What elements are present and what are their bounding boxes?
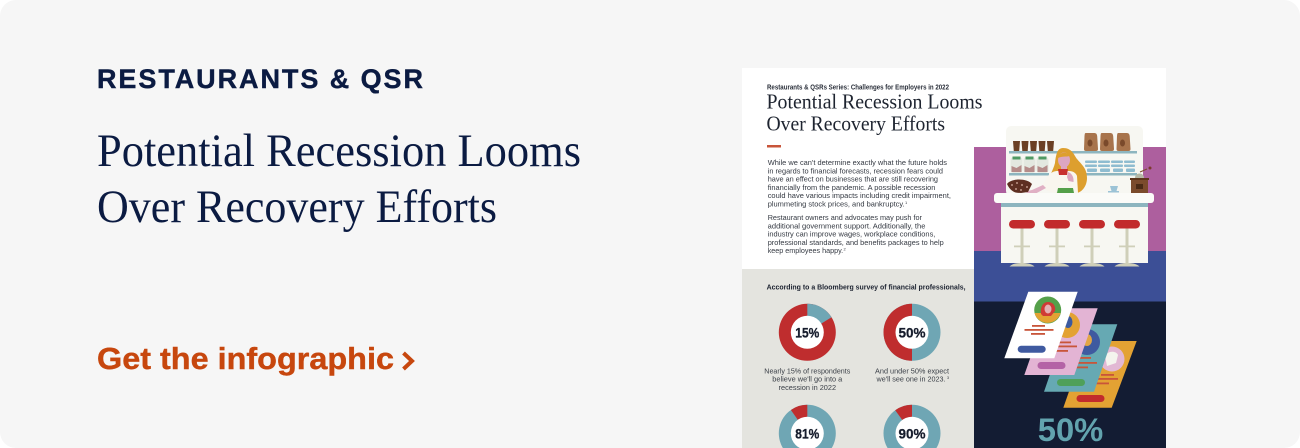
caption: 50%	[875, 366, 950, 384]
illustration: coffee shop counter	[974, 126, 1166, 302]
body paragraph one: could have various impacts including credit impairment,	[768, 191, 951, 200]
shelves	[1009, 151, 1137, 176]
card title	[766, 90, 982, 135]
series label: Restaurants & QSRs Series: Challenges for Employers in 2022	[767, 85, 949, 92]
call to action link: Get the infographic	[97, 341, 394, 376]
body paragraph one: have an effect on businesses that are still recovering	[768, 175, 938, 184]
profile card: orange	[1063, 341, 1137, 408]
caption: 50%: And under 50% expect	[875, 366, 950, 375]
panel: navy stat	[974, 292, 1166, 448]
donut: 81%	[779, 405, 836, 448]
caption: 15%: recession in 2022	[779, 383, 836, 392]
body paragraph one	[768, 158, 951, 208]
donut: 15%	[779, 304, 836, 361]
stacked bowls	[1085, 160, 1135, 172]
infographic preview card	[742, 68, 1166, 448]
body paragraph two: Restaurant owners and advocates may push for	[768, 213, 922, 222]
body paragraph one: in regards to financial forecasts, recession fears could	[768, 166, 943, 175]
eyebrow heading: RESTAURANTS & QSR	[97, 64, 423, 94]
donut: 50%: 50%	[898, 324, 926, 340]
card title: Over Recovery Efforts	[766, 111, 945, 135]
panel: survey donuts	[742, 269, 974, 448]
donut: 50%	[884, 304, 940, 361]
barista	[1026, 148, 1087, 195]
body paragraph two: 2	[844, 247, 846, 252]
donut: 90%: 90%	[898, 425, 926, 441]
survey heading: According to a Bloomberg survey of financial professionals,	[767, 282, 966, 291]
body paragraph one: 1	[905, 200, 908, 205]
bar stools	[1009, 220, 1140, 266]
main title: Over Recovery Efforts	[97, 181, 497, 233]
caption: 15%: believe we'll go into a	[772, 375, 843, 384]
body paragraph two: additional government support. Additionally, the	[768, 221, 925, 230]
coffee cup on counter	[1108, 186, 1119, 192]
main title	[97, 125, 581, 233]
caption: 50%: 3	[947, 375, 950, 380]
donut: 90%	[884, 405, 940, 448]
caption: 15%	[764, 366, 851, 392]
main title: Potential Recession Looms	[97, 125, 581, 177]
body paragraph two	[768, 213, 944, 255]
accent rule	[767, 145, 781, 148]
card title: Potential Recession Looms	[766, 90, 982, 114]
bowl of coffee beans	[1007, 180, 1032, 193]
panel: intro text	[766, 85, 982, 255]
profile card: teal	[1044, 324, 1117, 392]
body paragraph one: financially from the pandemic. A possible recession	[768, 183, 935, 192]
body paragraph two: keep employees happy.	[768, 246, 843, 255]
coffee bags	[1084, 133, 1130, 151]
body paragraph two: industry can improve wages, workplace conditions,	[768, 230, 935, 239]
body paragraph one: While we can't determine exactly what the future holds	[768, 158, 947, 167]
body paragraph one: plummeting stock prices, and bankruptcy.	[768, 200, 905, 208]
counter	[994, 193, 1154, 263]
profile card: pink	[1024, 308, 1098, 375]
coffee cups on shelf	[1013, 141, 1054, 151]
donut: 81%: 81%	[795, 425, 820, 441]
coffee grinder	[1130, 166, 1152, 193]
glass jars	[1010, 156, 1048, 173]
body paragraph two: professional standards, and benefits packages to help	[768, 238, 944, 247]
caption: 50%: we'll see one in 2023.	[876, 375, 946, 384]
stat: 50%: 50%	[1038, 412, 1103, 448]
profile card: white	[1004, 292, 1078, 358]
donut: 15%: 15%	[795, 324, 820, 340]
caption: 15%: Nearly 15% of respondents	[764, 366, 851, 375]
